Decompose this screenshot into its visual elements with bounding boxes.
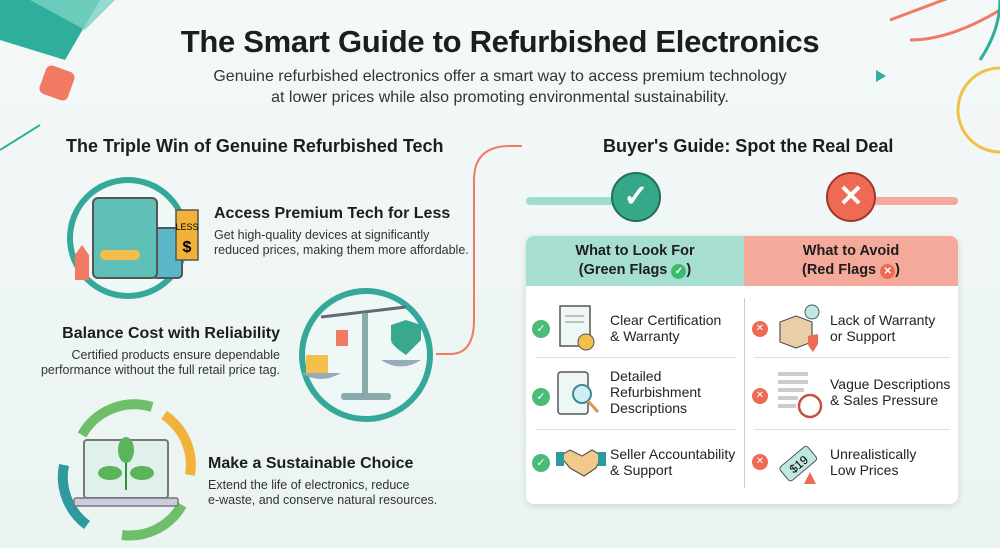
subtitle (213, 68, 787, 106)
row: lack of warranty: or Support (830, 328, 895, 344)
icon: green check badge: ✓ (623, 180, 649, 213)
row: low prices: Low Prices (830, 462, 898, 478)
row: low prices: ✕ (756, 456, 764, 467)
header: green flags: What to Look For (575, 243, 695, 259)
icon: green check badge (526, 172, 661, 222)
row: descriptions: Refurbishment (610, 384, 701, 400)
decoration: top-right shapes (876, 0, 1000, 154)
header: red flags: ✕ (883, 266, 892, 277)
row: lack of warranty (752, 304, 936, 352)
text: access premium: Access Premium Tech for Less (214, 205, 450, 222)
row: certification (532, 305, 721, 350)
row: low prices (752, 446, 916, 484)
text: balance cost: performance without the full retail price tag. (41, 363, 280, 377)
text: access premium: Get high-quality devices at significantly (214, 228, 429, 242)
header: red flags: What to Avoid (803, 243, 899, 259)
header: green flags (526, 236, 744, 286)
row: lack of warranty: Lack of Warranty (830, 312, 935, 328)
row: vague descriptions: ✕ (756, 390, 764, 401)
header: green flags: ✓ (675, 266, 683, 277)
row: vague descriptions: Vague Descriptions (830, 376, 950, 392)
row: certification: ✓ (536, 323, 546, 335)
connector line (436, 145, 522, 355)
row: descriptions: Detailed (610, 368, 661, 384)
icon: balance scale (299, 288, 433, 422)
row: seller: ✓ (536, 457, 546, 469)
icon: recycle laptop (58, 399, 196, 540)
icon: red x badge: ✕ (838, 180, 864, 213)
text: sustainable (208, 455, 437, 507)
row: certification: & Warranty (610, 328, 680, 344)
heading: buyer's guide: Buyer's Guide: Spot the Real Deal (603, 136, 893, 156)
title: The Smart Guide to Refurbished Electronics (181, 24, 819, 59)
decoration: top-left shapes (0, 0, 115, 151)
icon: devices upgrade: $ (183, 239, 192, 256)
text: access premium: reduced prices, making them more affordable. (214, 243, 469, 257)
icon: red x badge (826, 172, 958, 222)
text: sustainable: Make a Sustainable Choice (208, 455, 413, 472)
text: balance cost: Balance Cost with Reliability (62, 325, 280, 342)
header: red flags (744, 236, 958, 286)
header: red flags: (Red Flags ) (802, 262, 900, 278)
row: low prices: $19 (787, 452, 811, 476)
text: access premium (214, 205, 469, 257)
row: descriptions: ✓ (536, 391, 546, 403)
row: low prices: Unrealistically (830, 446, 916, 462)
row: certification: Clear Certification (610, 312, 721, 328)
row: seller: & Support (610, 462, 672, 478)
header: green flags: (Green Flags ) (579, 262, 691, 278)
text: sustainable: Extend the life of electronics, reduce (208, 478, 410, 492)
heading: triple win: The Triple Win of Genuine Refurbished Tech (66, 136, 444, 156)
row: seller (532, 446, 736, 478)
row: descriptions: Descriptions (610, 400, 687, 416)
row: lack of warranty: ✕ (756, 323, 764, 334)
row: vague descriptions (752, 372, 950, 418)
icon: devices upgrade: LESS (175, 222, 199, 232)
text: sustainable: e-waste, and conserve natural resources. (208, 493, 437, 507)
icon: devices upgrade (67, 177, 199, 299)
row: descriptions (532, 368, 701, 416)
row: vague descriptions: & Sales Pressure (830, 392, 938, 408)
panel: comparison table (526, 236, 958, 504)
subtitle: Genuine refurbished electronics offer a smart way to access premium technology (213, 68, 787, 85)
text: balance cost: Certified products ensure dependable (72, 348, 280, 362)
text: balance cost (41, 325, 280, 377)
subtitle: at lower prices while also promoting environmental sustainability. (271, 89, 729, 106)
row: seller: Seller Accountability (610, 446, 735, 462)
